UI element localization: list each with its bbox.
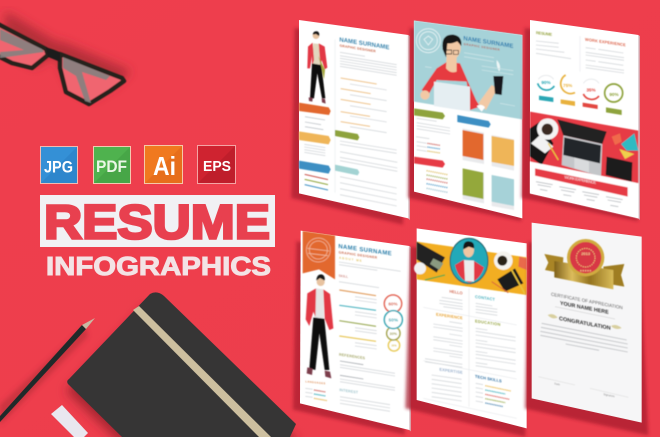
man illustration <box>420 35 503 112</box>
teal header <box>414 21 522 119</box>
papers <box>612 133 638 159</box>
subtitle: INFOGRAPHICS: INFOGRAPHICS <box>46 251 271 281</box>
signature left <box>538 377 575 387</box>
name: NAME SURNAME <box>339 37 389 51</box>
gold seal <box>567 239 604 276</box>
hello text <box>439 297 463 309</box>
experience text <box>341 78 387 133</box>
signature right <box>590 388 628 398</box>
ring: olive 30%: 30% <box>390 332 398 336</box>
footer columns <box>536 182 623 207</box>
profile text <box>340 52 397 75</box>
chart: red ring: 35% <box>586 87 597 92</box>
name: NAME SURNAME <box>338 244 392 257</box>
person illustration <box>306 274 333 378</box>
portrait oval <box>450 238 488 284</box>
icon: EPS badge <box>198 146 236 184</box>
tab: olive <box>335 130 359 140</box>
dividers <box>423 288 517 418</box>
tab: blue <box>457 115 491 128</box>
title: RESUME: RESUME <box>44 196 270 250</box>
tab: red <box>414 157 445 168</box>
heading: interest: INTEREST <box>339 388 359 395</box>
education text <box>340 141 397 171</box>
page sheet <box>300 231 409 430</box>
tab: blue <box>299 161 331 174</box>
swatch: orange <box>463 128 484 164</box>
skill bars <box>305 174 328 190</box>
gold ribbon <box>544 254 624 289</box>
recipient name: YOUR NAME HERE <box>560 301 609 316</box>
icon: Ai badge <box>144 146 182 184</box>
icon: JPG badge: JPG <box>44 158 73 176</box>
divider <box>555 307 615 319</box>
reference text <box>340 361 363 379</box>
signature left: Date <box>554 381 560 387</box>
job title: GRAPHIC DESIGNER <box>464 42 500 52</box>
footer banner: WORK EXPERIENCE <box>564 174 596 185</box>
heading: resume: RESUME <box>536 30 552 37</box>
ring: yellow: 20% <box>391 343 397 347</box>
chart: teal ring <box>538 75 554 102</box>
tab: teal <box>335 165 359 175</box>
icon: glasses <box>0 11 131 104</box>
language dots <box>305 388 327 401</box>
congratulation <box>548 314 622 332</box>
chart: olive ring: 90% <box>609 92 620 97</box>
tab: yellow <box>299 131 331 144</box>
ring: teal 50%: 50% <box>389 317 399 322</box>
expertise text <box>432 375 462 401</box>
logo circle <box>416 29 440 53</box>
heading: expertise: EXPERTISE <box>439 367 463 375</box>
tab: orange <box>299 103 331 115</box>
experience text <box>425 322 463 367</box>
page sheet <box>532 223 642 423</box>
orange ribbon <box>303 231 335 279</box>
tech skill dots <box>476 383 511 407</box>
column divider <box>334 39 336 193</box>
education text <box>476 328 516 372</box>
heading: skill: SKILL <box>339 274 348 279</box>
skill lines <box>339 282 379 349</box>
panel: resume 4 <box>293 231 411 435</box>
certificate heading: CERTIFICATE OF APPRECIATION <box>551 292 623 310</box>
page sheet <box>530 20 638 218</box>
panel: resume 3 <box>521 20 640 221</box>
header text <box>425 53 515 106</box>
panel: resume 2 <box>408 21 522 221</box>
white footer <box>530 162 638 218</box>
panel: certificate <box>525 223 648 435</box>
heading: contact: CONTACT <box>475 294 496 302</box>
icon: EPS badge: EPS <box>203 158 231 175</box>
panel: resume 1 <box>291 20 410 225</box>
profile text <box>417 118 450 134</box>
about text <box>339 262 401 271</box>
swatch: teal <box>492 175 514 210</box>
job title: GRAPHIC DESIGNER <box>340 44 376 54</box>
divider <box>579 36 581 72</box>
heading: education: EDUCATION <box>475 318 500 327</box>
icon: JPG badge <box>40 146 78 184</box>
red band <box>530 112 638 183</box>
page sheet <box>299 20 408 218</box>
congratulation: CONGRATULATION <box>559 316 611 332</box>
ring: yellow <box>388 340 400 351</box>
subheading: ABOUT ME <box>339 256 362 263</box>
gold seal: ★★★★★ <box>580 268 592 272</box>
chart: olive ring <box>605 84 623 115</box>
contact lines <box>305 117 325 130</box>
heading: languages: LANGUAGES <box>305 379 326 385</box>
gold seal: 2013 <box>581 251 591 256</box>
icon: PDF badge: PDF <box>96 158 127 176</box>
heading: experience: EXPERIENCE <box>436 312 463 320</box>
laptop illustration <box>557 119 607 177</box>
chart: yellow ring: 75% <box>563 83 573 88</box>
certificate text <box>540 323 628 352</box>
coffee cup icon <box>530 118 558 165</box>
swatch: yellow <box>492 135 514 171</box>
ring: teal 50% <box>384 311 402 329</box>
tab: olive <box>414 108 445 119</box>
page sheet <box>417 228 527 428</box>
signature right: Signature <box>603 392 615 398</box>
page sheet <box>414 21 522 218</box>
icon: pencil <box>0 318 95 425</box>
interest text <box>340 177 397 206</box>
swatch: olive <box>463 168 484 203</box>
name: NAME SURNAME <box>463 36 513 50</box>
ring: olive 30% <box>387 327 400 340</box>
feather icon <box>497 60 500 72</box>
contact text <box>476 303 497 315</box>
resume text <box>536 41 571 59</box>
footer banner <box>535 168 628 197</box>
person illustration <box>307 31 327 104</box>
heading: tech skills: TECH SKILLS <box>475 374 502 384</box>
icon: PDF badge <box>94 146 130 184</box>
interest text <box>340 397 390 411</box>
heading: hello: HELLO <box>449 289 463 296</box>
ring: red 60% <box>384 295 402 312</box>
icon: eraser <box>51 405 88 437</box>
keyboard icon <box>414 242 445 280</box>
language dots <box>416 137 440 153</box>
panel: resume 5 <box>405 228 527 437</box>
icon: notebook <box>66 292 296 437</box>
skill dots <box>427 171 447 192</box>
job title: GRAPHIC DESIGNER <box>339 250 378 260</box>
chart: teal ring: 90% <box>541 80 552 85</box>
coffee and notebook icons <box>492 251 527 294</box>
icon: Ai badge: Ai <box>153 151 176 181</box>
yellow banner <box>417 242 527 295</box>
language text <box>304 144 325 156</box>
work text <box>586 48 624 73</box>
heading: work experience: WORK EXPERIENCE <box>585 37 626 47</box>
tablet <box>606 157 632 182</box>
chart: red ring <box>583 79 599 109</box>
heading: references: REFERENCES <box>339 353 366 360</box>
ring: red 60%: 60% <box>388 301 399 306</box>
chart: yellow ring <box>561 75 575 106</box>
